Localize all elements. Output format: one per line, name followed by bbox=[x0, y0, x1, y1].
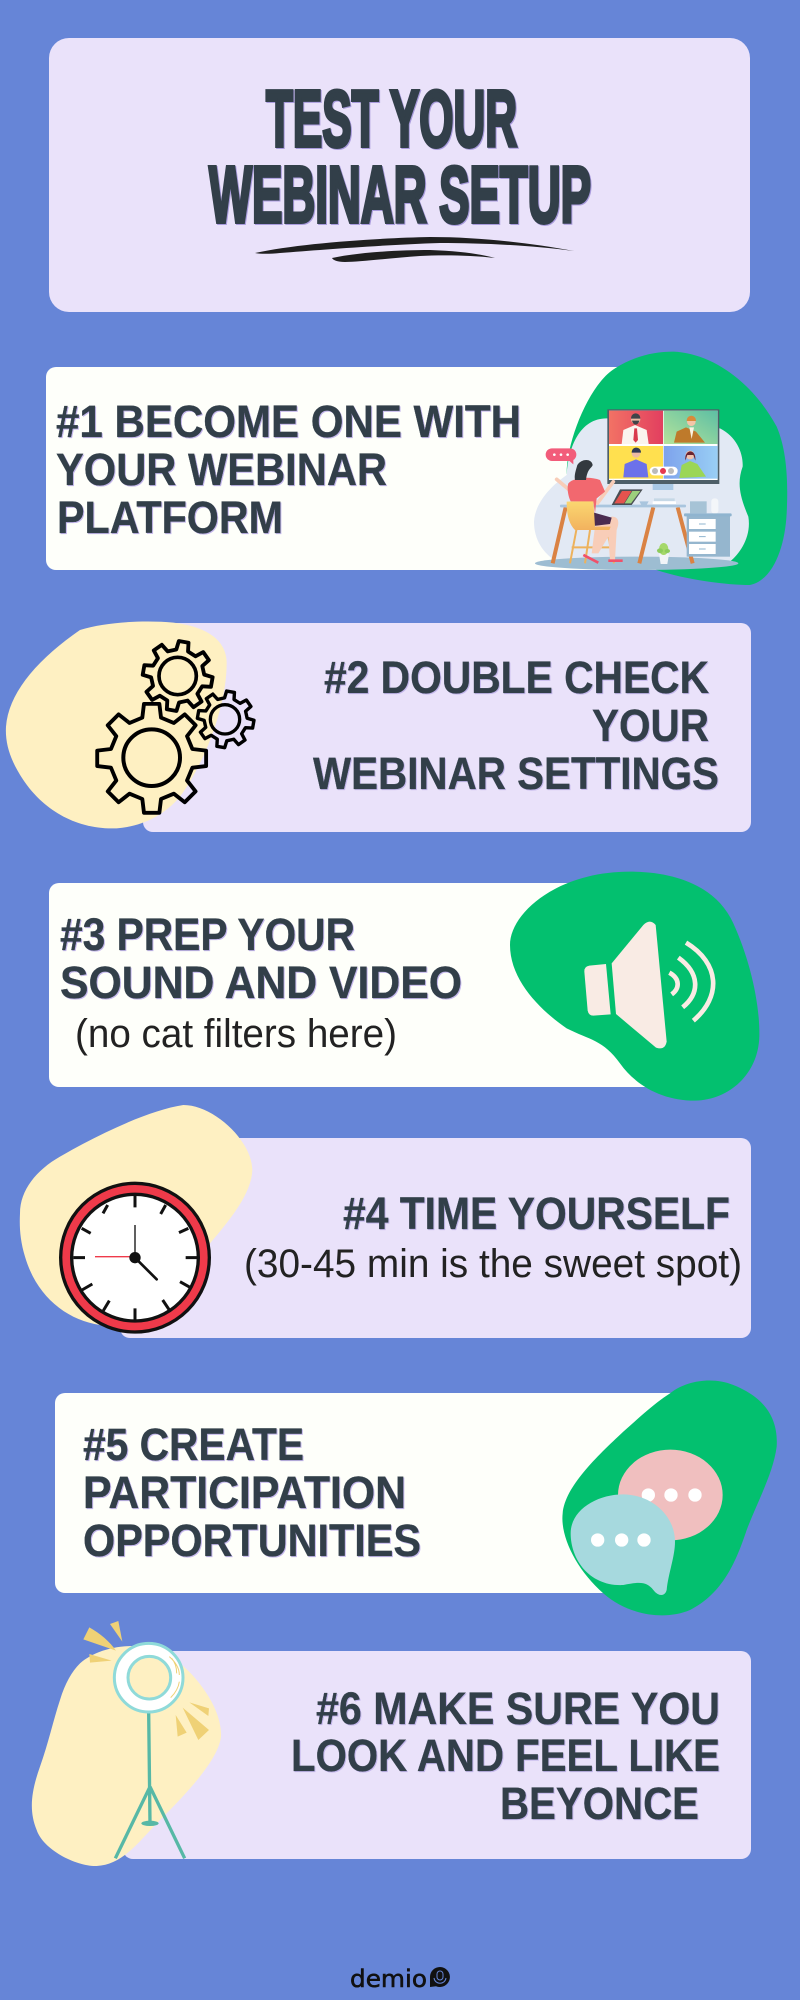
icon: green blob with webinar illustration bbox=[534, 352, 787, 585]
icon: yellow blob with ring light bbox=[32, 1621, 221, 1866]
text: tip 3: #3 PREP YOUR bbox=[60, 909, 355, 960]
text: tip 6: #6 MAKE SURE YOU bbox=[316, 1683, 720, 1734]
text: tip 5: OPPORTUNITIES bbox=[83, 1515, 421, 1566]
panel: tip 2 bbox=[6, 621, 751, 832]
text: tip 2: #2 DOUBLE CHECK bbox=[324, 652, 709, 703]
text: tip 4: (30-45 min is the sweet spot) bbox=[244, 1242, 742, 1286]
text: tip 2 bbox=[313, 652, 719, 799]
icon: yellow blob with gears bbox=[6, 621, 258, 828]
text: tip 3 bbox=[60, 909, 462, 1056]
cabinet and plant bbox=[657, 498, 732, 564]
panel: tip 1 bbox=[46, 352, 787, 585]
icon: yellow blob with clock bbox=[20, 1105, 252, 1332]
heading: test your webinar setup: TEST YOUR bbox=[266, 74, 517, 163]
text: tip 5: PARTICIPATION bbox=[83, 1467, 406, 1518]
text: tip 5 bbox=[83, 1419, 421, 1566]
panel: tip 5 bbox=[55, 1380, 777, 1615]
text: tip 4 bbox=[244, 1188, 742, 1286]
text: tip 2: YOUR bbox=[592, 700, 709, 751]
woman on chair bbox=[546, 448, 623, 563]
heading: test your webinar setup bbox=[209, 74, 591, 239]
panel: tip 3 bbox=[49, 872, 759, 1101]
text: tip 1: #1 BECOME ONE WITH bbox=[56, 396, 521, 447]
text: tip 6: BEYONCE bbox=[500, 1778, 699, 1829]
text: tip 3: SOUND AND VIDEO bbox=[60, 957, 462, 1008]
monitor with four video panes bbox=[607, 409, 719, 490]
text: tip 1: YOUR WEBINAR bbox=[56, 444, 387, 495]
text: tip 2: WEBINAR SETTINGS bbox=[313, 748, 719, 799]
panel: tip 4 bbox=[20, 1105, 751, 1338]
text: tip 5: #5 CREATE bbox=[83, 1419, 304, 1470]
brush underline bbox=[255, 237, 574, 262]
icon: green blob with chat bubbles bbox=[562, 1380, 777, 1615]
panel: title bbox=[49, 38, 750, 312]
panel: tip 6 bbox=[32, 1621, 751, 1866]
text: tip 6: LOOK AND FEEL LIKE bbox=[291, 1730, 720, 1781]
text: tip 3: (no cat filters here) bbox=[75, 1012, 397, 1056]
logo: demio: demio bbox=[350, 1965, 427, 1993]
text: tip 1 bbox=[56, 396, 521, 543]
desk bbox=[553, 489, 693, 563]
text: tip 4: #4 TIME YOURSELF bbox=[343, 1188, 730, 1239]
text: tip 6 bbox=[291, 1683, 720, 1829]
icon: green blob with speaker bbox=[510, 872, 759, 1101]
text: tip 1: PLATFORM bbox=[57, 492, 283, 543]
